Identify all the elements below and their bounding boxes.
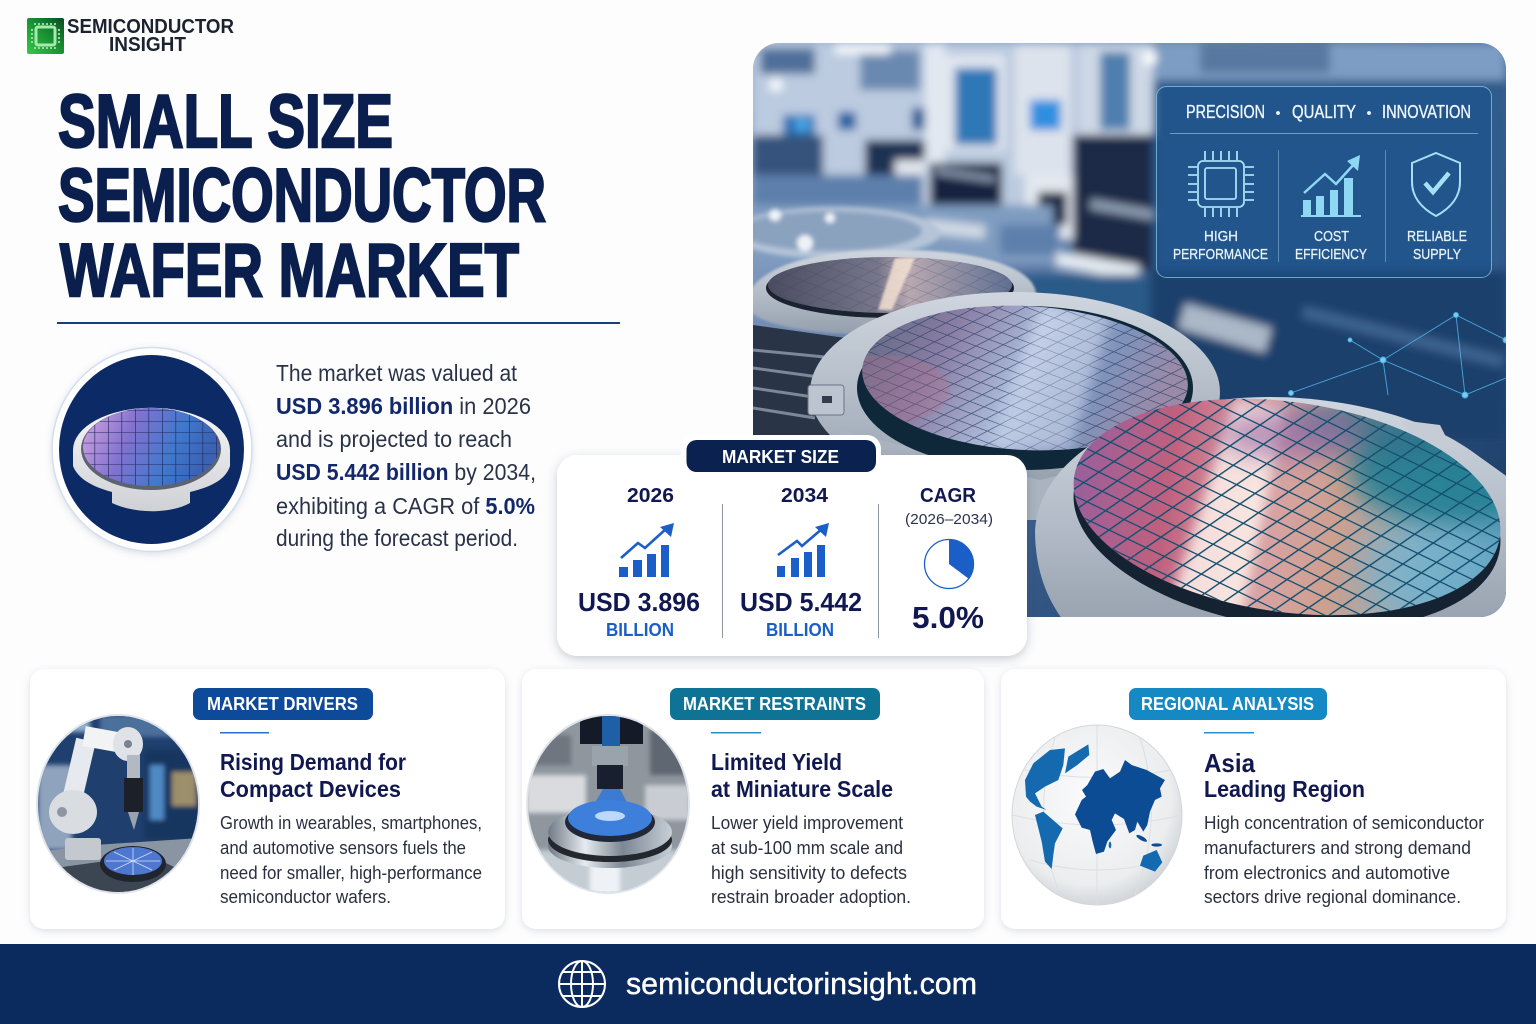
panel: market drivers — [30, 669, 505, 929]
panel tagline: PRECISION — [1186, 102, 1265, 122]
hero image: wafers in a fab — [753, 43, 1506, 617]
drivers text: need for smaller, high-performance — [220, 863, 482, 883]
column: 2034: USD 5.442 — [740, 587, 862, 617]
regional heading: Asia — [1204, 748, 1255, 778]
drivers text — [220, 813, 482, 907]
title: SEMICONDUCTOR — [58, 153, 546, 237]
drivers text: semiconductor wafers. — [220, 887, 391, 907]
drivers text: and automotive sensors fuels the — [220, 838, 466, 858]
drivers text: Growth in wearables, smartphones, — [220, 813, 482, 833]
drivers heading: Rising Demand for — [220, 749, 406, 775]
icon: web globe — [559, 961, 605, 1007]
column: CAGR: 5.0% — [912, 600, 984, 635]
panel tagline — [1187, 104, 1470, 122]
footer — [0, 944, 1536, 1024]
restraints heading — [711, 749, 893, 802]
logo wordmark — [67, 15, 234, 56]
column: CAGR — [905, 485, 993, 635]
image: inspection machine — [526, 712, 690, 896]
icon: chart 2034 — [777, 523, 829, 577]
title — [58, 79, 546, 312]
column: CAGR: CAGR — [920, 485, 977, 507]
market description paragraph — [276, 360, 536, 551]
drivers heading: Compact Devices — [220, 776, 401, 802]
panel feature labels: SUPPLY — [1413, 246, 1461, 263]
market size badge: MARKET SIZE — [722, 447, 839, 467]
restraints heading: Limited Yield — [711, 749, 842, 775]
icon: growth chart — [1301, 155, 1361, 217]
wafer three with holder — [745, 250, 1036, 440]
market description paragraph: during the forecast period. — [276, 525, 518, 551]
regional text: from electronics and automotive — [1204, 863, 1450, 883]
restraints text: at sub-100 mm scale and — [711, 838, 903, 858]
panel feature labels — [1174, 230, 1467, 260]
column: 2034: BILLION — [766, 620, 834, 640]
website address: semiconductorinsight.com — [626, 966, 977, 1001]
regional heading: Leading Region — [1204, 776, 1365, 802]
column: 2026 — [578, 485, 700, 640]
icon: globe — [1012, 725, 1182, 905]
panel feature labels: RELIABLE — [1407, 228, 1467, 245]
drivers heading — [220, 749, 406, 802]
market drivers badge: MARKET DRIVERS — [207, 694, 358, 714]
panel tagline: INNOVATION — [1382, 102, 1471, 122]
wafer one with holder — [1035, 397, 1506, 617]
title: SMALL SIZE — [58, 79, 393, 163]
regional text: High concentration of semiconductor — [1204, 813, 1484, 833]
icon: wafer badge — [52, 348, 252, 552]
regional analysis badge — [1129, 688, 1327, 720]
wafer two with holder — [808, 292, 1220, 520]
market description paragraph: The market was valued at — [276, 360, 518, 386]
restraints text — [711, 813, 911, 907]
market size badge — [686, 440, 876, 472]
icon: chip — [1188, 151, 1254, 217]
logo: Semiconductor Insight — [27, 15, 234, 56]
blurred factory background — [753, 43, 1506, 440]
column: CAGR: (2026–2034) — [905, 511, 993, 528]
column: 2026: 2026 — [627, 485, 674, 507]
market drivers badge — [193, 688, 373, 720]
panel feature labels: PERFORMANCE — [1173, 246, 1268, 263]
icon: chart 2026 — [619, 523, 674, 577]
icon: shield — [1412, 153, 1460, 216]
image: robot arm — [36, 712, 200, 896]
panel feature labels: COST — [1314, 228, 1349, 245]
regional text: sectors drive regional dominance. — [1204, 887, 1461, 907]
market description paragraph: USD 3.896 billion in 2026 — [276, 393, 531, 419]
logo wordmark: INSIGHT — [109, 33, 186, 56]
panel: regional analysis — [1001, 669, 1506, 929]
market restraints badge: MARKET RESTRAINTS — [683, 694, 866, 714]
column: 2026: USD 3.896 — [578, 587, 700, 617]
logo wordmark: SEMICONDUCTOR — [67, 15, 234, 38]
rear blurred wafer — [730, 207, 940, 259]
hero feature panel — [1156, 86, 1492, 278]
column: 2034: 2034 — [781, 485, 829, 507]
column: 2034 — [740, 485, 862, 640]
restraints text: high sensitivity to defects — [711, 863, 907, 883]
market description paragraph: and is projected to reach — [276, 426, 512, 452]
restraints text: restrain broader adoption. — [711, 887, 911, 907]
panel: market size — [557, 435, 1027, 656]
regional heading — [1204, 748, 1365, 802]
market restraints badge — [670, 688, 880, 720]
panel feature labels: HIGH — [1204, 228, 1238, 245]
panel tagline: QUALITY — [1292, 102, 1356, 122]
panel: market restraints — [522, 669, 984, 929]
panel feature labels: EFFICIENCY — [1295, 246, 1367, 263]
restraints heading: at Miniature Scale — [711, 776, 893, 802]
column: 2026: BILLION — [606, 620, 674, 640]
restraints text: Lower yield improvement — [711, 813, 903, 833]
network overlay — [1288, 312, 1509, 398]
icon: CAGR pie — [924, 539, 974, 588]
regional analysis badge: REGIONAL ANALYSIS — [1141, 694, 1314, 714]
title: WAFER MARKET — [60, 228, 519, 312]
market description paragraph: exhibiting a CAGR of 5.0% — [276, 493, 535, 519]
regional text — [1204, 813, 1484, 907]
market description paragraph: USD 5.442 billion by 2034, — [276, 459, 536, 485]
regional text: manufacturers and strong demand — [1204, 838, 1471, 858]
icon: green chip — [27, 18, 64, 54]
